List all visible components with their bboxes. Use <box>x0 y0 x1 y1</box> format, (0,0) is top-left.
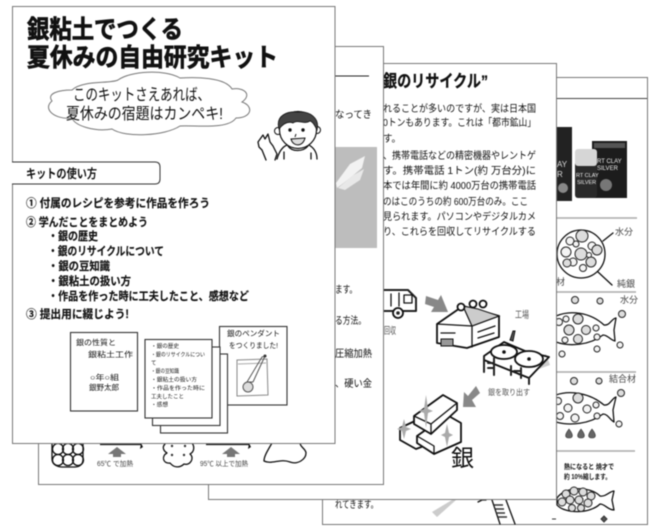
arrow: to factory <box>425 295 448 312</box>
illustration: report contents stack: て <box>151 360 157 367</box>
illustration: report contents stack <box>145 340 228 433</box>
diagram: clay particle circle <box>556 226 635 289</box>
diagram: sintered silver blob <box>264 443 306 463</box>
icon: silver ingots <box>397 395 461 454</box>
diagram: fish drying, water evaporating: 水分 <box>620 294 638 305</box>
text block: recycling explanation: 、携帯電話などの精密機器やレントゲ <box>383 149 536 162</box>
list: usage steps: ① 付属のレシピを参考に作品を作ろう <box>26 196 210 210</box>
text block: recycling explanation: のはこのうちの約 600万台のみ。ここ <box>383 195 528 208</box>
title <box>27 16 278 72</box>
callout: cloud speech bubble: 夏休みの宿題はカンペキ! <box>66 105 223 123</box>
label: factory: 工場 <box>515 309 529 321</box>
callout: cloud speech bubble: このキットさえあれば、 <box>73 86 210 104</box>
text block: recycling explanation: 見られます。パソコンやデジタルカメ <box>383 210 536 223</box>
text block: recycling explanation: れることが多いのですが、実は日本国 <box>383 102 536 115</box>
text: fragments: ます。 <box>335 284 357 296</box>
illustration: report cover sheet: ○年○組 <box>90 372 120 382</box>
illustration: bottom fragments <box>432 500 515 524</box>
text block: recycling explanation <box>383 102 536 238</box>
illustration: report contents stack: 工夫したこと <box>151 392 184 400</box>
illustration: report cover sheet: 銀野太郎 <box>89 382 119 392</box>
diagram: clay particles at start <box>52 443 84 467</box>
title: 夏休みの自由研究キット <box>27 44 278 72</box>
label: extract silver: 銀を取り出す <box>488 387 530 397</box>
text: shrink note: 約 10%縮します。 <box>564 472 611 481</box>
diagram: finished shrunken fish <box>552 487 614 522</box>
arrow: heat to 95 degrees: 95℃ 以上で加熱 <box>200 459 248 468</box>
illustration: report cover sheet <box>70 332 138 411</box>
panel: page 4, silver clay science sheet <box>322 78 648 524</box>
illustration: pendant report page: 銀のペンダント <box>227 328 280 338</box>
icon: collection truck <box>383 290 416 318</box>
text: shrink note <box>564 462 614 481</box>
photo: silver clay products: RT CLAY <box>597 159 622 165</box>
diagram: fish firing, binder removed <box>554 373 636 438</box>
list: usage steps: ③ 提出用に綴じよう! <box>26 307 129 321</box>
panel: page 1, cover sheet <box>12 6 335 444</box>
diagram: clay after binder burns <box>163 443 194 467</box>
list: usage steps: ・銀の歴史 <box>48 229 98 243</box>
list: usage steps: ・銀のリサイクルについて <box>48 244 164 258</box>
text: fragment: なってき <box>335 109 372 121</box>
diagram: fish drying, water evaporating <box>556 294 638 357</box>
photo: silver clay products: SILVER <box>577 180 596 186</box>
list: usage steps: ② 学んだことをまとめよう <box>26 215 148 229</box>
text: shrink note: 熱になると 焼才で <box>564 462 614 471</box>
section heading: how to use the kit: キットの使い方 <box>26 166 97 181</box>
title: 銀粘土でつくる <box>27 16 183 44</box>
arrow: heat to 65 degrees <box>97 443 143 468</box>
diagram: clay particle circle: 純銀 <box>617 278 635 289</box>
text: fragments: る方法。 <box>335 314 366 327</box>
photo: silver clay products <box>556 127 627 201</box>
section heading: how to use the kit <box>12 162 160 184</box>
label: silver: 銀 <box>451 445 474 471</box>
text block: recycling explanation: す。 <box>383 133 401 145</box>
photo: silver clay products: R <box>557 170 563 179</box>
icon: smelting furnaces <box>484 331 550 384</box>
illustration: report contents stack: ・銀の歴史 <box>151 342 179 350</box>
diagram: clay particle circle: 材 <box>556 276 565 287</box>
list: usage steps <box>26 196 249 321</box>
list: usage steps: ・作品を作った時に工夫したこと、感想など <box>48 289 249 303</box>
text block: recycling explanation: り、これらを回収してリサイクルする <box>383 226 536 238</box>
text: fragments <box>335 284 372 390</box>
photo: silver clay products: SILVER <box>597 166 619 172</box>
illustration: report contents stack: ・銀のリサイクルについ <box>151 350 205 358</box>
list: usage steps: ・銀粘土の扱い方 <box>48 274 131 288</box>
text: page 4 bottom line: れてきます。 <box>335 499 378 511</box>
diagram: fish firing, binder removed: 結合材 <box>609 373 636 384</box>
text: fragments: 圧縮加熱 <box>335 347 372 360</box>
arrow: to silver <box>463 386 480 407</box>
diagram: clay particle circle: 水分 <box>615 226 633 237</box>
text: fragments: 、硬い金 <box>335 377 372 390</box>
illustration: pendant report page <box>220 326 287 405</box>
callout: cloud speech bubble <box>49 72 250 135</box>
list: usage steps: ・銀の豆知識 <box>48 259 110 273</box>
photo: silver clay products: AY <box>557 160 568 169</box>
panel: page 2, silver clay firing <box>38 46 384 484</box>
icon: factory <box>437 300 499 348</box>
arrow: heat to 95 degrees <box>200 443 251 468</box>
arrow: heat to 65 degrees: 65℃ で加熱 <box>97 459 133 468</box>
text block: recycling explanation: す。携帯電話 1トン(約 万台分)に <box>383 164 536 177</box>
icon: boy pointing <box>258 112 320 160</box>
illustration: report cover sheet: 銀粘土工作 <box>88 349 134 359</box>
illustration: report contents stack: ・銀粘土の扱い方 <box>151 376 198 384</box>
text block: recycling explanation: 本では年間に約 4000万台の携帯電話 <box>383 179 536 192</box>
photo: silver clay products: RT CLAY <box>576 173 599 179</box>
text block: recycling explanation: 0トンもあります。これは「都市鉱山」 <box>383 116 536 129</box>
label: collection: 回収 <box>384 326 396 337</box>
photo: gray image <box>335 147 377 248</box>
illustration: pendant report page: をつくりました! <box>229 341 278 350</box>
illustration: report contents stack: ・感想 <box>151 400 168 408</box>
illustration: report contents stack: ・銀の豆知識 <box>151 367 179 375</box>
heading: silver recycling: 銀のリサイクル” <box>383 72 488 91</box>
panel: page 3, silver recycling <box>208 64 556 500</box>
illustration: report contents stack: ・作品を作った時に <box>151 384 205 392</box>
illustration: report cover sheet: 銀の性質と <box>76 337 116 347</box>
